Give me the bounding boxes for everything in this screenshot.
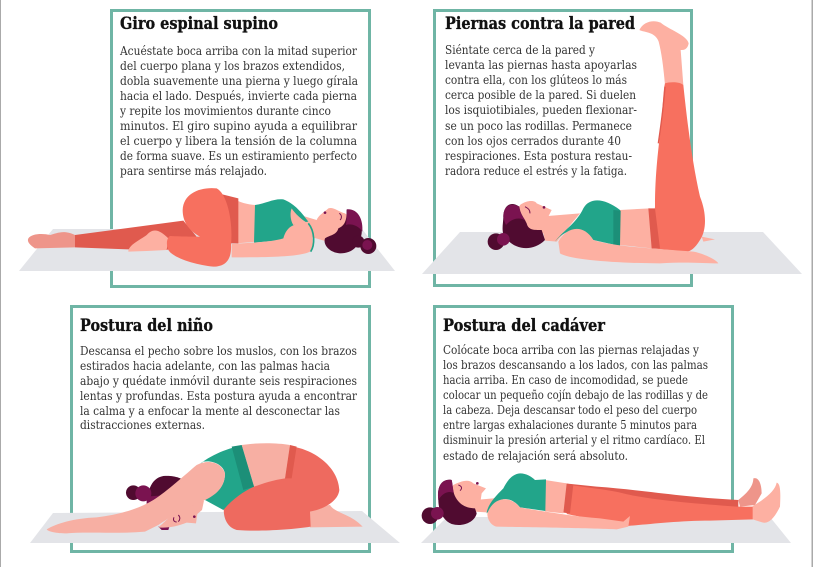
text block: Postura del niño: Descansa el pecho sobre los muslos, con los brazos: [80, 343, 357, 358]
text block: Giro espinal supino: de forma suave. Es un estiramiento perfecto: [120, 148, 357, 163]
illustration: corpse pose on mat: [421, 473, 791, 543]
panel: Giro espinal supino: [112, 10, 370, 286]
text block: Giro espinal supino: para sentirse más relajado.: [120, 163, 267, 178]
heading: Postura del niño: Postura del niño: [80, 316, 213, 335]
illustration: child pose on mat: [30, 443, 400, 543]
text block: Giro espinal supino: el cuerpo y libera la tensión de la columna: [120, 133, 358, 148]
panel: Postura del niño: [72, 306, 370, 552]
heading: Giro espinal supino: Giro espinal supino: [120, 14, 278, 33]
text block: Piernas contra la pared: radora reduce el estrés y la fatiga.: [445, 163, 627, 178]
text block: Giro espinal supino: dobla suavemente una pierna y luego gírala: [120, 73, 359, 88]
text block: Postura del cadáver: [443, 342, 708, 463]
text block: Postura del cadáver: Colócate boca arriba con las piernas relajadas y: [443, 342, 699, 357]
text block: Postura del cadáver: disminuir la presión arterial y el ritmo cardíaco. El: [443, 432, 705, 447]
panel: Postura del cadáver: [434, 306, 732, 552]
illustration: legs up the wall pose on mat: [422, 21, 802, 274]
text block: Giro espinal supino: y repite los movimientos durante cinco: [119, 103, 331, 118]
text block: Piernas contra la pared: cerca posible de la pared. Si duelen: [445, 87, 636, 102]
text block: Giro espinal supino: hacia el lado. Después, invierte cada pierna: [120, 88, 358, 103]
text block: Giro espinal supino: Acuéstate boca arriba con la mitad superior: [119, 43, 357, 58]
text block: Piernas contra la pared: Siéntate cerca de la pared y: [445, 42, 595, 57]
text block: Postura del cadáver: estado de relajación será absoluto.: [443, 448, 628, 463]
text block: Piernas contra la pared: respiraciones. Esta postura restau-: [445, 148, 632, 163]
heading: Piernas contra la pared: Piernas contra la pared: [445, 14, 635, 33]
text block: Postura del cadáver: colocar un pequeño cojín debajo de las rodillas y de: [443, 387, 708, 402]
text block: Piernas contra la pared: levanta las piernas hasta apoyarlas: [445, 57, 637, 72]
text block: Postura del niño: estirados hacia adelante, con las palmas hacia: [80, 358, 331, 373]
text block: Giro espinal supino: del cuerpo plana y los brazos extendidos,: [120, 58, 345, 73]
illustration: twist pose on mat: [19, 188, 395, 271]
text block: Postura del cadáver: hacia arriba. En caso de incomodidad, se puede: [443, 372, 688, 387]
text block: Giro espinal supino: minutos. El giro supino ayuda a equilibrar: [120, 118, 357, 133]
text block: Postura del cadáver: los brazos descansando a los lados, con las palmas: [443, 357, 708, 372]
panel: Piernas contra la pared: [434, 10, 692, 286]
text block: Postura del cadáver: la cabeza. Deja descansar todo el peso del cuerpo: [443, 402, 697, 417]
text block: Giro espinal supino: [119, 43, 359, 178]
text block: Postura del cadáver: entre largas exhalaciones durante 5 minutos para: [443, 417, 697, 432]
text block: Postura del niño: distracciones externas.: [80, 417, 205, 432]
text block: Postura del niño: lentas y profundas. Esta postura ayuda a encontrar: [80, 388, 357, 403]
text block: Piernas contra la pared: se un poco las rodillas. Permanece: [445, 118, 632, 133]
text block: Piernas contra la pared: con los ojos cerrados durante 40: [445, 133, 621, 148]
text block: Piernas contra la pared: contra ella, con los glúteos lo más: [445, 72, 627, 87]
heading: Postura del cadáver: Postura del cadáver: [443, 316, 605, 335]
text block: Postura del niño: abajo y quédate inmóvil durante seis respiraciones: [80, 373, 357, 388]
text block: Postura del niño: [80, 343, 357, 432]
text block: Piernas contra la pared: los isquiotibiales, pueden flexionar-: [445, 102, 637, 117]
text block: Postura del niño: la calma y a enfocar la mente al desconectar las: [80, 403, 340, 418]
text block: Piernas contra la pared: [445, 42, 637, 178]
